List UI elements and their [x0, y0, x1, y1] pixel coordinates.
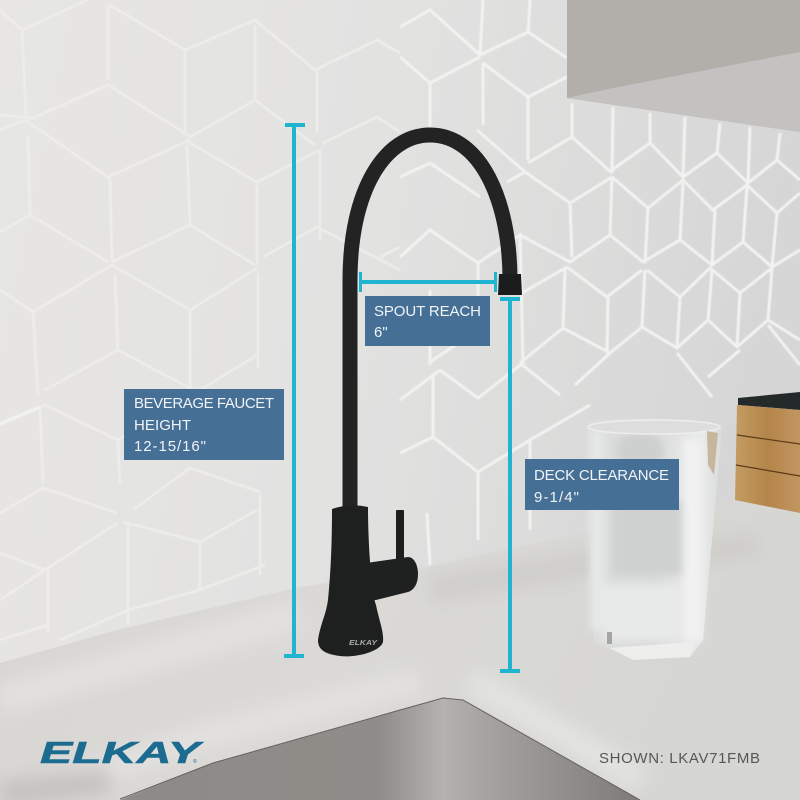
label: beverage faucet height: HEIGHT — [134, 417, 191, 434]
dimension line: deck clearance — [500, 297, 520, 673]
spout tip — [498, 274, 522, 295]
label: spout reach: 6" — [374, 324, 388, 341]
label: deck clearance — [525, 459, 679, 510]
base logo: ELKAY — [349, 640, 379, 647]
sink basin — [120, 698, 640, 800]
tile grout lines, right — [0, 0, 800, 565]
label: deck clearance: DECK CLEARANCE — [534, 467, 669, 484]
cabinet: wood drawers — [735, 392, 800, 513]
handle body — [366, 557, 418, 600]
range hood — [567, 0, 800, 132]
label: spout reach: SPOUT REACH — [374, 303, 481, 320]
caption: model shown: SHOWN: LKAV71FMB — [599, 750, 760, 767]
faucet base — [318, 505, 383, 656]
label: beverage faucet height — [124, 389, 284, 460]
label: beverage faucet height: BEVERAGE FAUCET — [134, 395, 274, 412]
label: deck clearance: 9-1/4" — [534, 489, 579, 506]
dimension line: spout reach — [359, 272, 497, 292]
dimension line: faucet height — [284, 123, 305, 658]
faucet — [318, 135, 522, 656]
water glass — [587, 418, 722, 660]
tile grout lines, left — [0, 0, 400, 640]
label: beverage faucet height: 12-15/16" — [134, 438, 206, 455]
label: spout reach — [365, 296, 490, 346]
lever handle — [396, 510, 404, 562]
spout and riser — [350, 135, 510, 515]
countertop — [0, 500, 800, 800]
logo: Elkay: ® — [193, 758, 197, 765]
marble veining — [0, 545, 760, 795]
logo: Elkay — [40, 735, 205, 770]
logo: Elkay: ELKAY — [40, 735, 205, 770]
